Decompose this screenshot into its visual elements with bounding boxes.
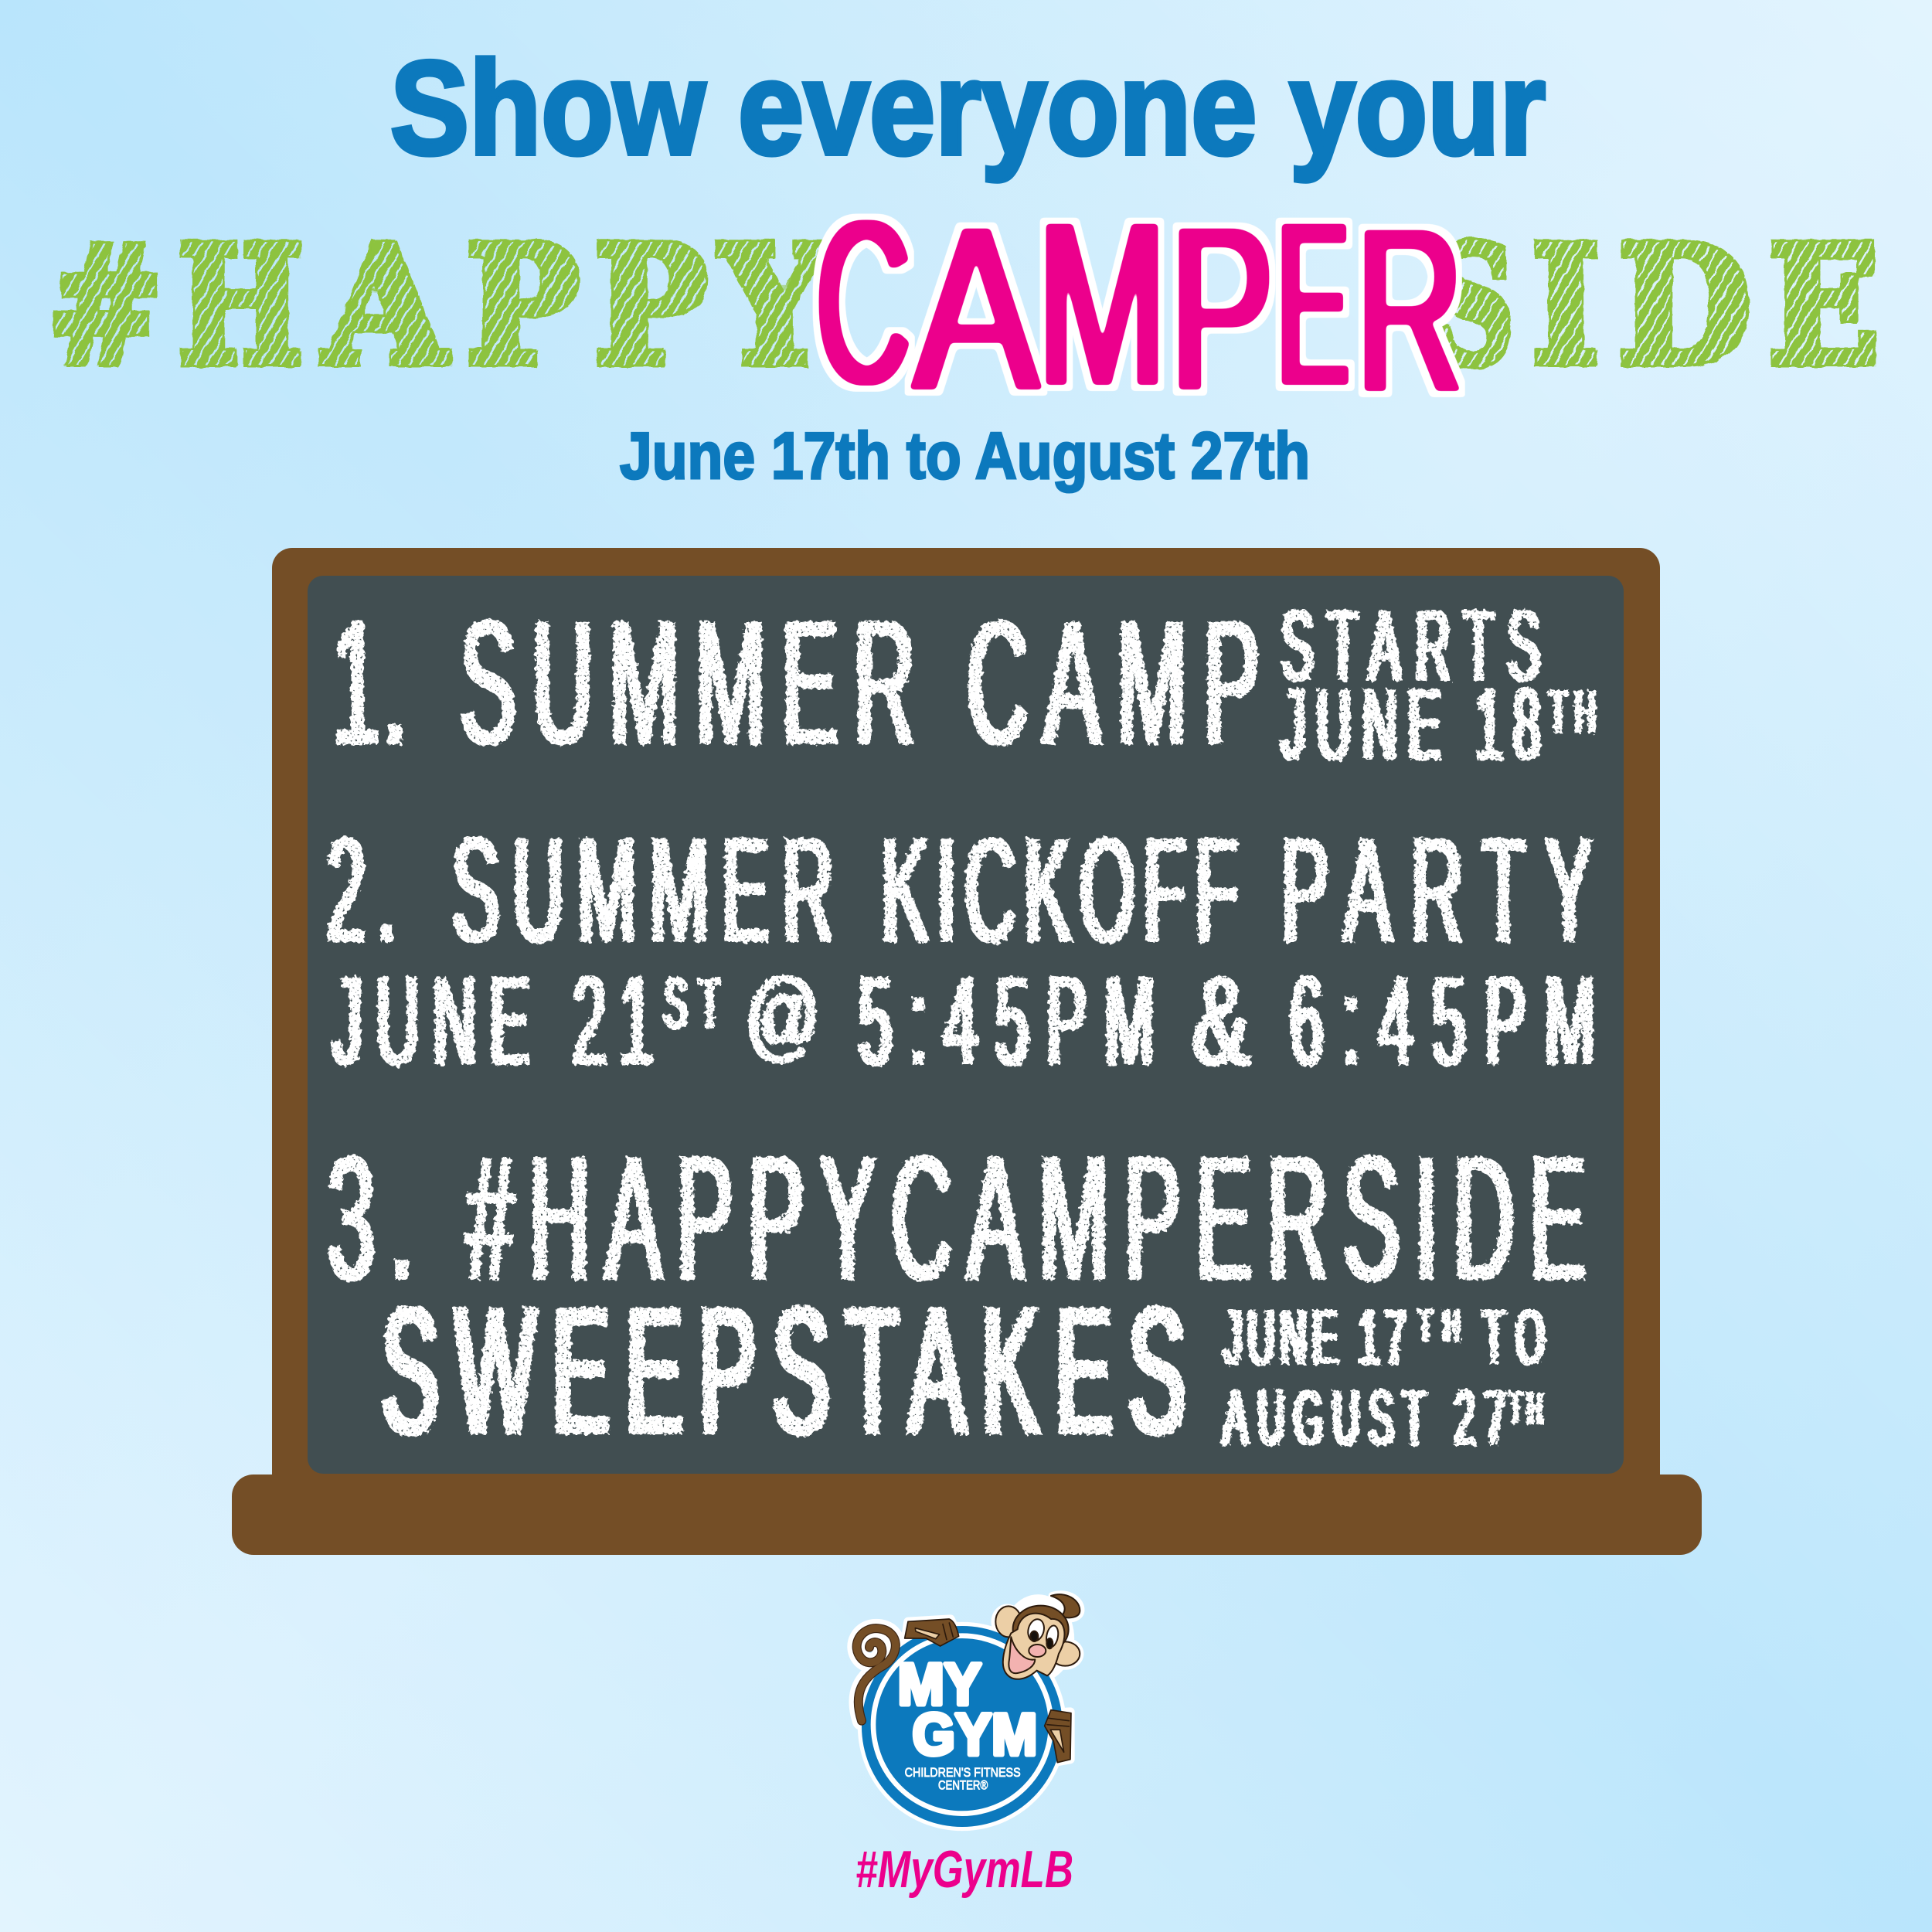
green slab letters [48,210,1879,401]
chalk text: JUNE 21 [332,951,653,1092]
chalk text: ST [665,964,720,1043]
chalkboard [232,548,1702,1555]
chalk text: AUGUST 27 [1223,1374,1505,1461]
pink camper letters: E [1277,174,1349,434]
hashtag headline [48,172,1879,440]
chalk text: 5:45PM [859,951,1155,1092]
mouth [1009,1637,1035,1673]
pink camper letters: P [1170,179,1274,438]
chalk text: SUMMER [452,808,834,973]
logo: My Gym monkey badge [857,1594,1083,1831]
white halo [857,1594,1083,1831]
green slab letters: Y [719,210,828,401]
chalk text: TO [1482,1294,1545,1381]
board frame [272,548,1660,1498]
right pupil [1046,1638,1053,1648]
lower hand [1045,1710,1071,1763]
green slab letters: # [48,210,162,401]
chalk text: TH [1509,1383,1543,1434]
gym hashtag: #MyGymLB [855,1840,1073,1899]
chalk text: CAMP [967,583,1260,781]
monkey head [995,1594,1080,1679]
logo wordmark GYM: GYM [913,1702,1037,1768]
pink camper letters: A [913,179,1039,438]
hair curl [1051,1594,1080,1617]
chalk text: 2. [326,808,396,973]
green slab letters: P [594,210,707,401]
green slab letters: A [322,210,448,401]
chalk text [326,583,1596,1471]
green slab letters: D [1618,210,1751,401]
chalk text: JUNE 18 [1281,668,1540,781]
right ear [1050,1641,1080,1666]
logo wordmark MY: MY [898,1651,981,1717]
chalk text: TH [1419,1301,1460,1351]
chalk text: 1. [332,583,406,781]
green slab letters: S [1431,210,1515,401]
pink camper letters: R [1356,180,1463,440]
left eye [1026,1617,1046,1643]
chalk text: JUNE 17 [1223,1294,1406,1381]
monkey and badge silhouette [857,1594,1083,1831]
chalk text: @ [746,958,819,1071]
pink camper letters [816,172,1463,440]
nose [1029,1645,1046,1657]
chalk text: 3. #HAPPYCAMPERSIDE [328,1119,1586,1316]
pink camper letters: C [816,172,910,432]
chalk text: STARTS [1281,590,1540,702]
right eye [1045,1624,1060,1648]
white ring [873,1636,1051,1814]
face [1003,1614,1065,1679]
chalk text: SWEEPSTAKES [382,1272,1185,1471]
tail [857,1628,896,1721]
green slab letters: P [466,210,579,401]
board shelf [232,1475,1702,1555]
chalk text: KICKOFF [881,808,1238,973]
logo tagline second line: CENTER® [938,1777,988,1792]
left pupil [1030,1631,1038,1641]
chalk text: SUMMER [460,583,915,781]
date line: June 17th to August 27th [620,420,1310,493]
chalk text: & [1192,951,1250,1091]
left ear [995,1606,1022,1637]
chalk text: PARTY [1281,808,1593,973]
pink camper letters: M [1037,174,1167,434]
chalk text: 6:45PM [1290,951,1595,1092]
green slab letters: H [178,210,303,401]
title: Show everyone your [390,34,1546,182]
blue badge [862,1626,1063,1827]
slate surface [308,576,1624,1474]
upper hand [905,1619,959,1646]
green slab letters: E [1768,210,1879,401]
chalk text: TH [1549,679,1596,746]
head dome [1013,1606,1069,1653]
logo tagline: CHILDREN'S FITNESS [905,1765,1021,1780]
green slab letters: I [1532,210,1600,401]
